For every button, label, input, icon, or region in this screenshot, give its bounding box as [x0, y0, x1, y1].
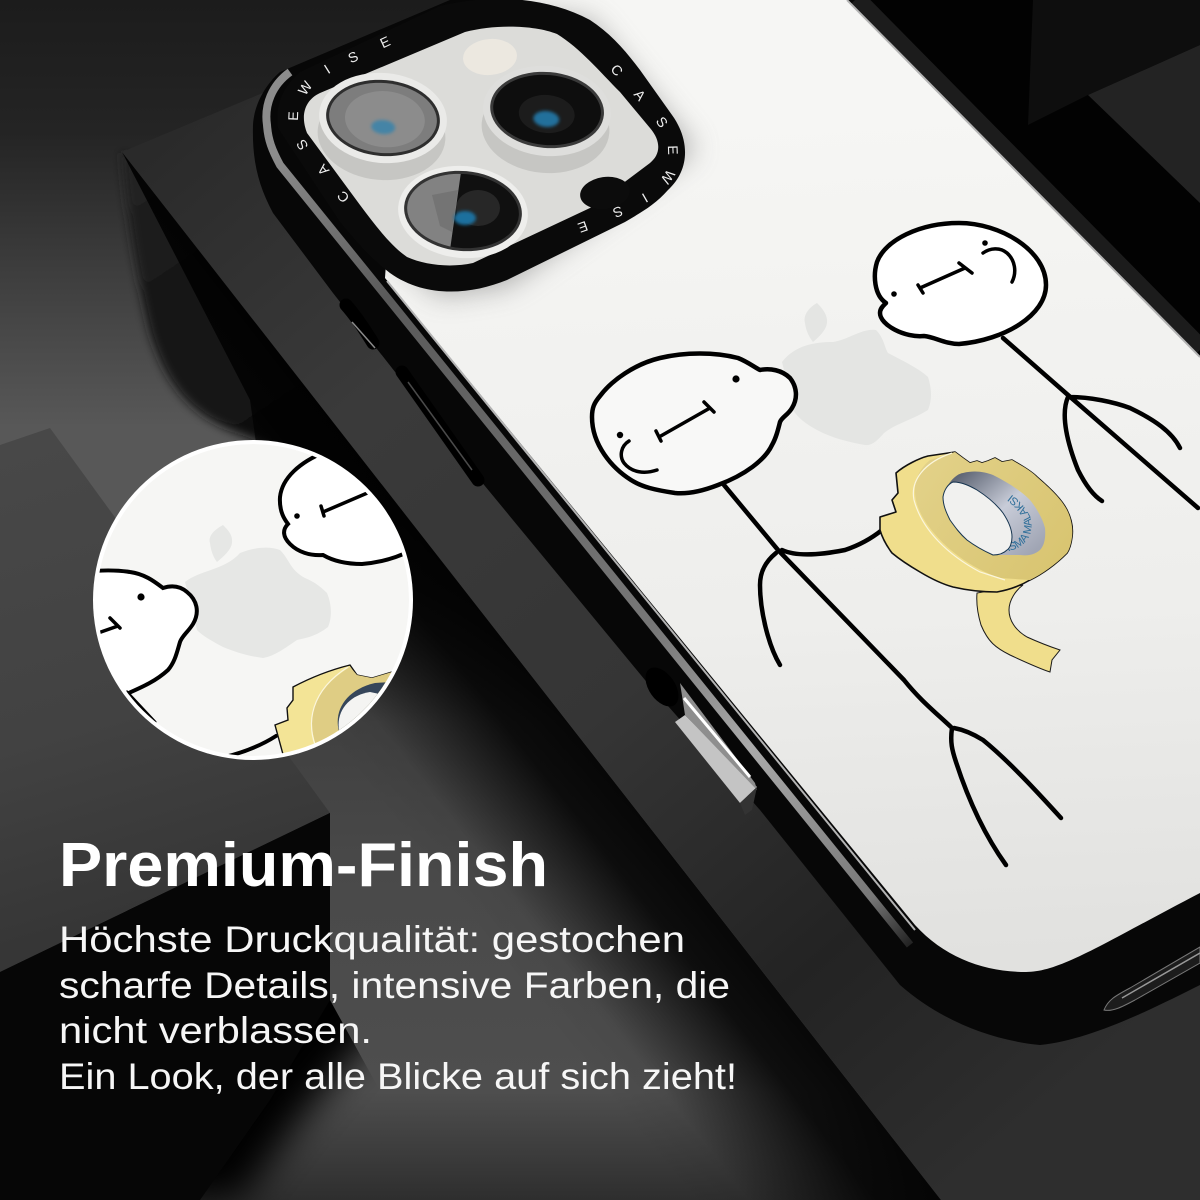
- brand ring text: E: [665, 145, 681, 155]
- side button: [639, 662, 757, 815]
- zoomed apple logo: [185, 525, 331, 658]
- tape face: [915, 452, 1072, 580]
- body: [724, 485, 1061, 865]
- brand ring text: S: [293, 137, 311, 153]
- brand ring text: I: [321, 61, 333, 77]
- floor patch beside the block: [0, 425, 300, 700]
- brand ring text: W: [657, 167, 678, 188]
- brand ring text: I: [639, 190, 651, 206]
- face: [891, 240, 1015, 297]
- description text: nicht verblassen.: [59, 1010, 372, 1051]
- charging port: [1104, 947, 1200, 1010]
- brand ring text: [285, 33, 681, 236]
- camera shadow: [388, 0, 703, 310]
- upper right darkness: [847, 0, 1200, 357]
- brand ring text: E: [285, 111, 301, 121]
- description text: Ein Look, der alle Blicke auf sich zieht!: [59, 1056, 737, 1097]
- masking tape roll: [879, 451, 1074, 673]
- back panel edge highlight: [387, 0, 1200, 930]
- brand ring text: C: [334, 188, 352, 206]
- masking tape roll: ASMA MALAKSI: [1008, 495, 1032, 551]
- lens ultra wide: [314, 68, 451, 185]
- brand ring text: S: [345, 48, 361, 66]
- head: [875, 223, 1046, 344]
- brand ring text: S: [611, 203, 625, 221]
- flash: [462, 37, 518, 77]
- tape tail: [977, 585, 1060, 672]
- island frame: [277, 0, 685, 292]
- phone case body: [253, 0, 1200, 1045]
- volume button: [402, 372, 478, 480]
- tape printed label: [978, 480, 1032, 552]
- phone back panel: [385, 0, 1200, 972]
- lower left block top: [0, 428, 330, 972]
- microphone hole: [578, 174, 632, 212]
- heading: Premium-Finish: [59, 831, 548, 900]
- upper right block: [1088, 45, 1200, 203]
- brand ring text: A: [631, 86, 650, 104]
- brand ring text: S: [653, 114, 671, 130]
- apple logo show-through: [782, 303, 931, 445]
- zoomed head right: [278, 456, 403, 566]
- silence switch: [346, 305, 375, 348]
- tape inner wall: [943, 472, 1045, 555]
- brand ring text: W: [295, 77, 316, 98]
- zoomed arm: [225, 736, 276, 757]
- big block wall: [0, 430, 1200, 1200]
- upper wall with soft shadow edge: [122, 152, 420, 520]
- brand ring text: E: [576, 218, 590, 236]
- lens main: [398, 166, 528, 258]
- tape hole: [943, 482, 1012, 555]
- face: [617, 375, 740, 472]
- zoomed tape: [274, 664, 392, 754]
- zoom detail circle: [93, 440, 413, 760]
- head: [592, 354, 796, 493]
- camera glass plate: [304, 27, 658, 265]
- description text: Höchste Druckqualität: gestochen: [59, 919, 685, 960]
- stick figure right: [875, 223, 1198, 508]
- camera island: [277, 0, 685, 292]
- lower left block front: [0, 813, 368, 1200]
- zoomed head left: [97, 568, 199, 695]
- lens telephoto: [478, 61, 615, 178]
- brand ring text: C: [608, 61, 626, 79]
- tape outer: [880, 452, 1072, 592]
- zoomed artwork: [100, 444, 409, 756]
- brand ring text: E: [377, 33, 393, 51]
- description text: scharfe Details, intensive Farben, die: [59, 965, 730, 1006]
- body: [1003, 338, 1198, 508]
- stick figure left: [592, 354, 1061, 865]
- description text: [59, 919, 737, 1097]
- phone: [253, 0, 1200, 1045]
- chrome edge stripes: [266, 0, 1200, 945]
- brand ring text: A: [313, 161, 332, 179]
